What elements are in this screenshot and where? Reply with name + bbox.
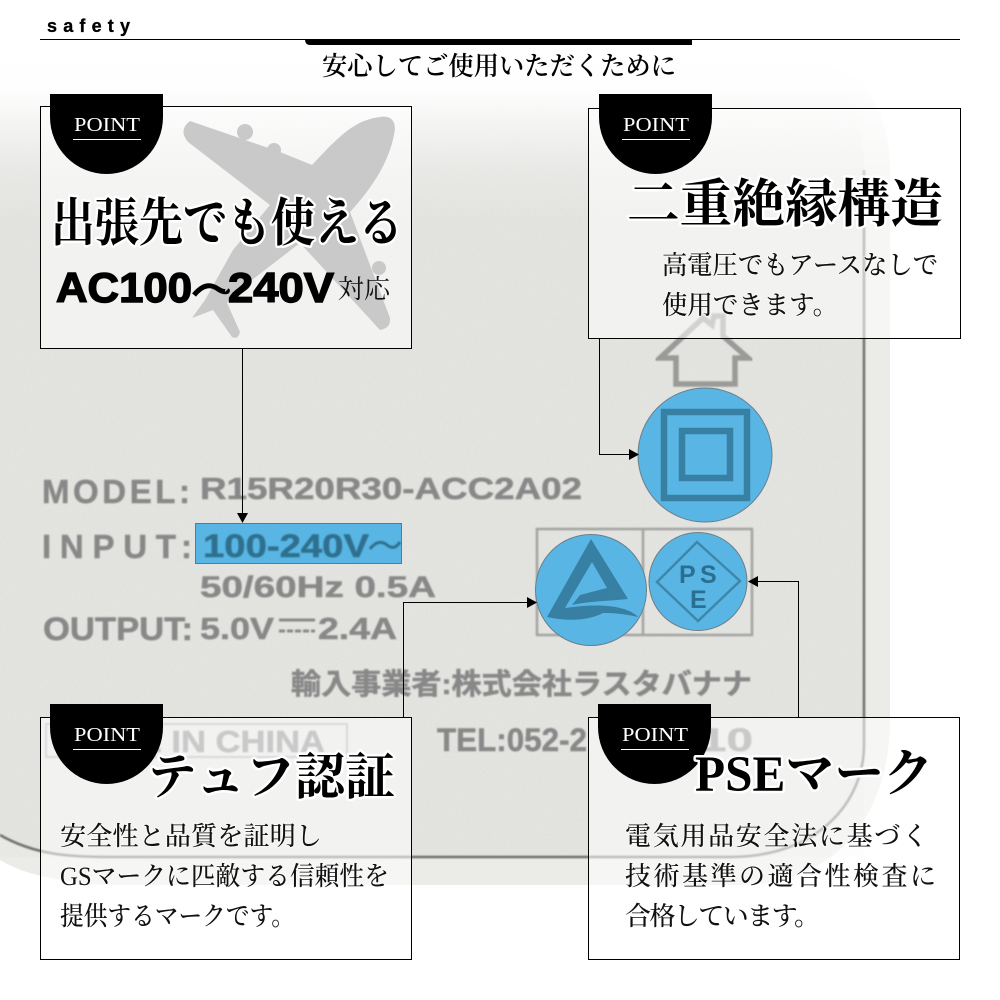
- heading: 二重絶縁構造: [627, 176, 943, 234]
- panel: double insulation: [588, 94, 960, 338]
- icon: double insulation mark: [638, 388, 772, 522]
- product label text: 2.4A: [318, 611, 397, 646]
- description: 技術基準の適合性検査に: [625, 862, 936, 891]
- icon: airplane: [183, 117, 395, 338]
- badge: POINT: POINT: [74, 724, 140, 746]
- heading: PSEマーク: [695, 747, 933, 803]
- product label text: MODEL:: [42, 473, 190, 510]
- subheading: AC100: [56, 264, 192, 311]
- arrow: panel 2 to double insulation: [600, 338, 639, 460]
- product label text: 10: [700, 722, 753, 758]
- arrow: panel 4 to PSE: [748, 576, 798, 717]
- product label text: MADE IN CHINA: [60, 724, 325, 759]
- panel: usable on business trips: [40, 94, 412, 348]
- product label text: INPUT:: [42, 528, 192, 565]
- highlight: input voltage: [196, 524, 402, 564]
- product label text: TEL:052-2: [437, 722, 587, 758]
- highlight: input voltage: 100-240V: [203, 528, 370, 564]
- icon: PSE mark: E: [690, 586, 707, 614]
- description: [60, 822, 389, 931]
- description: [662, 251, 938, 320]
- description: 高電圧でもアースなしで: [662, 251, 938, 280]
- icon: PSE mark: [649, 532, 747, 630]
- badge: POINT: [598, 704, 711, 784]
- description: 合格しています。: [625, 902, 820, 931]
- product label text: 輸入事業者:株式会社ラスタバナナ: [291, 668, 752, 701]
- badge: POINT: [50, 704, 163, 784]
- product label text: [42, 471, 753, 759]
- description: 使用できます。: [662, 291, 838, 320]
- badge: POINT: POINT: [74, 114, 140, 136]
- description: 電気用品安全法に基づく: [625, 822, 928, 851]
- badge: POINT: [599, 94, 712, 174]
- header: [40, 16, 960, 81]
- icon: house: [660, 316, 748, 384]
- icon: PSE mark: P: [679, 561, 696, 589]
- subheading: [56, 264, 391, 311]
- description: 提供するマークです。: [60, 902, 295, 931]
- subheading: 対応: [338, 275, 391, 304]
- description: [625, 822, 936, 931]
- icon: PSE mark: S: [700, 561, 717, 589]
- badge: POINT: POINT: [623, 114, 689, 136]
- product label text: 5.0V: [200, 611, 274, 646]
- icon: TUV mark: [536, 534, 646, 646]
- panel: TUV certification: [40, 704, 412, 960]
- badge: POINT: [50, 94, 163, 174]
- header: safety: [47, 16, 130, 36]
- product label text: 50/60Hz 0.5A: [200, 571, 436, 604]
- description: 安全性と品質を証明し: [60, 822, 322, 851]
- arrow: panel 3 to TUV: [404, 597, 537, 717]
- panel: PSE mark: [588, 704, 960, 960]
- arrow: panel 1 to input: [237, 348, 248, 523]
- product label text: R15R20R30-ACC2A02: [200, 471, 582, 506]
- heading: テュフ認証: [147, 749, 395, 805]
- badge: POINT: POINT: [622, 724, 688, 746]
- subheading: 240V: [228, 264, 334, 311]
- description: GSマークに匹敵する信頼性を: [60, 862, 389, 891]
- product label text: OUTPUT:: [43, 611, 193, 647]
- heading: 出張先でも使える: [51, 196, 403, 253]
- header: 安心してご使用いただくために: [322, 52, 676, 81]
